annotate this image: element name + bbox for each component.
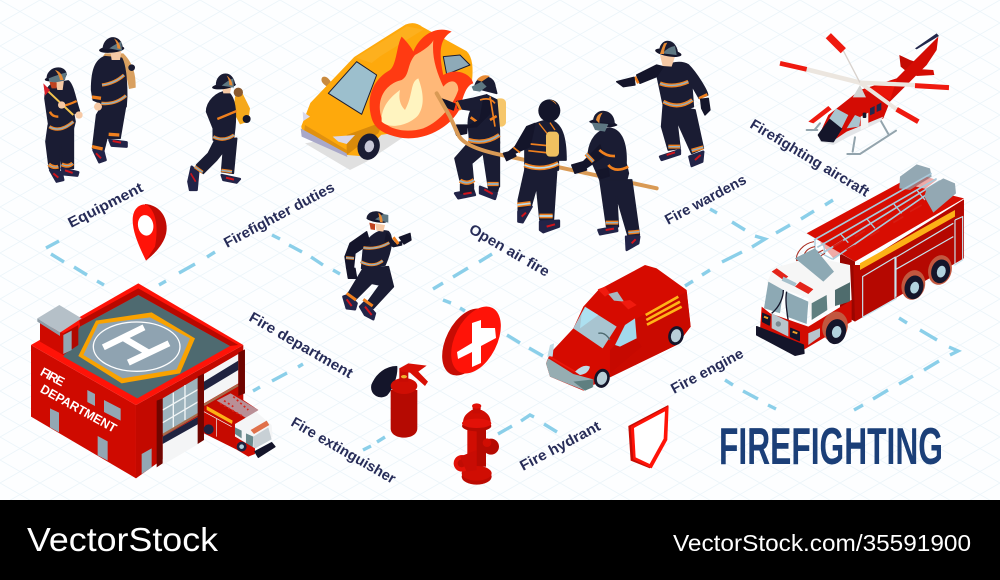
first aid cross disc: [432, 298, 511, 384]
label: Fire hydrant: Fire hydrant: [517, 419, 604, 475]
firefighter running: [343, 212, 411, 319]
building sign: FIRE: [38, 365, 67, 389]
dashed connector lines: [46, 200, 958, 450]
building walls: [31, 345, 245, 478]
fire engine: [757, 164, 964, 355]
firefighter with axe: [43, 68, 83, 182]
truck body: [807, 183, 964, 322]
helicopter: [780, 33, 949, 154]
firefighter carrying child: [188, 74, 251, 190]
footer bar: [0, 500, 1000, 580]
label: Firefighting aircraft: Firefighting aircraft: [747, 117, 872, 201]
firefighter holding hose, back view: [503, 99, 566, 232]
fire hydrant: [454, 403, 499, 485]
truck cab: [757, 248, 852, 355]
footer image id: VectorStock.com/35591900: [673, 530, 971, 556]
helipad: [78, 312, 195, 383]
firefighter carrying hose: [92, 38, 136, 162]
footer brand: VectorStock: [27, 521, 219, 558]
label: Firefighter duties: Firefighter duties: [221, 180, 337, 252]
building sign: DEPARTMENT: [38, 382, 119, 436]
label: Equipment: Equipment: [66, 180, 146, 232]
burning car: [301, 26, 470, 170]
firefighter pointing: [617, 42, 710, 166]
fire extinguisher: [372, 363, 428, 438]
firefighter with nozzle: [437, 75, 657, 199]
building wall windows and doors: [50, 329, 152, 474]
label: Open air fire: Open air fire: [466, 222, 552, 280]
helicopter skids: [807, 119, 896, 154]
flame: [370, 30, 473, 138]
fire department building: [31, 283, 275, 478]
label: Fire engine: Fire engine: [668, 346, 747, 398]
small fire truck: [204, 393, 275, 457]
fire van: [546, 265, 691, 391]
label: Fire department: Fire department: [246, 310, 355, 382]
label: Fire wardens: Fire wardens: [662, 172, 749, 229]
building roof: [31, 283, 243, 405]
truck ladder: [795, 164, 956, 282]
shield icon: [628, 405, 669, 468]
equipment map pin: [133, 204, 167, 261]
firefighter holding hose, front view: [572, 112, 639, 250]
label: Fire extinguisher: Fire extinguisher: [288, 415, 398, 488]
